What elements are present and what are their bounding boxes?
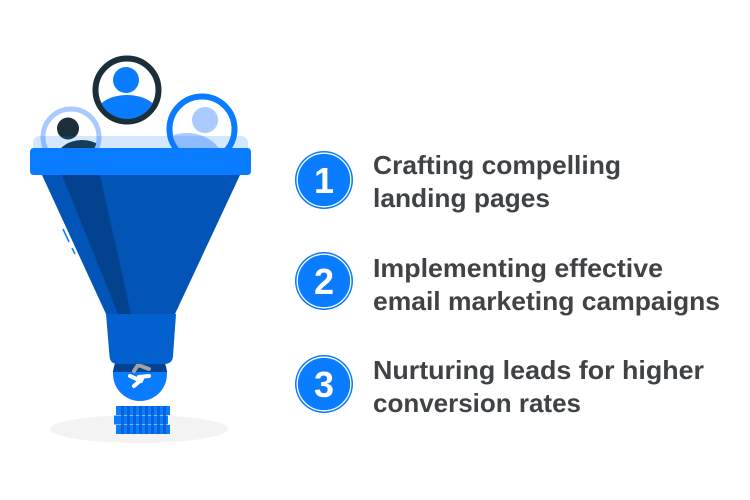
text: item 3: conversion rates — [373, 388, 581, 418]
text: item 1: Crafting compelling — [373, 150, 621, 180]
funnel dark stripe — [62, 175, 131, 314]
text: item 3: Nurturing leads for higher — [373, 355, 704, 385]
text: item 1: landing pages — [373, 183, 550, 213]
funnel illustration — [30, 58, 251, 434]
coin stack — [114, 406, 170, 434]
funnel neck — [106, 314, 176, 364]
funnel side highlights — [63, 229, 75, 254]
text: item 2: email marketing campaigns — [373, 286, 720, 316]
number badge 2 — [295, 252, 353, 310]
number badge 3: 3 — [314, 364, 334, 405]
number badge 1: 1 — [314, 160, 334, 201]
text: item 3 — [373, 355, 704, 418]
text: item 2: Implementing effective — [373, 253, 663, 283]
item 3 — [295, 355, 704, 418]
coin falling — [113, 364, 167, 401]
funnel front rim — [30, 148, 251, 175]
funnel body — [42, 175, 240, 314]
number badge 2: 2 — [314, 261, 334, 302]
icon: user avatar left — [40, 106, 102, 148]
item 1 — [295, 150, 621, 213]
number badge 1 — [295, 151, 353, 209]
icon: user avatar dark ring — [92, 56, 162, 124]
text: item 1 — [373, 150, 621, 213]
text: item 2 — [373, 253, 720, 316]
icon: coin symbol — [130, 365, 149, 386]
number badge 3 — [295, 355, 353, 413]
icon: user avatar right — [166, 94, 238, 148]
item 2 — [295, 252, 720, 316]
ground shadow — [50, 415, 228, 443]
funnel back rim — [33, 136, 248, 160]
